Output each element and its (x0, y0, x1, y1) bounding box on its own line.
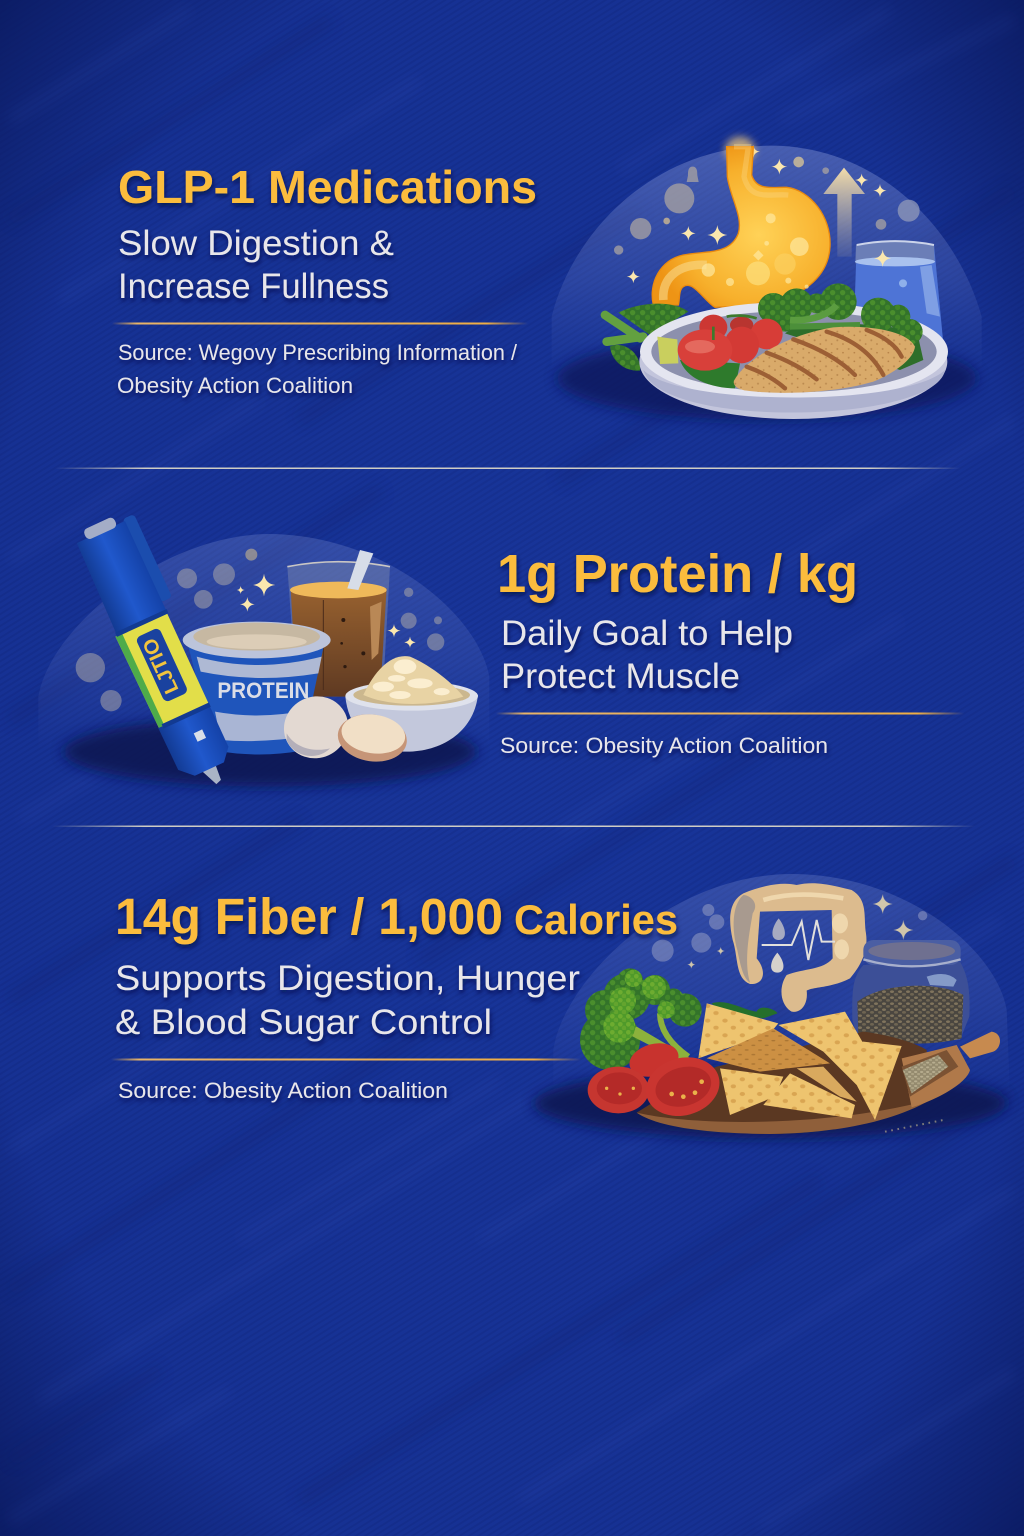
broccoli (758, 283, 923, 370)
broccoli (580, 968, 702, 1070)
chia seed jar (852, 940, 970, 1044)
bubbles (652, 904, 927, 962)
backdrop (553, 874, 1010, 1097)
injector pen: LJTIO (139, 635, 183, 697)
injector pen (69, 508, 251, 797)
icon: stomach (652, 147, 830, 307)
stomach glow (725, 137, 755, 163)
cup label: PROTEIN (217, 678, 309, 703)
tomatoes (678, 315, 783, 371)
pen clip (122, 514, 172, 602)
sparkles (687, 894, 913, 969)
subheading (501, 614, 793, 696)
wooden plate (637, 1032, 930, 1134)
wooden scoop with seeds (902, 1032, 1000, 1107)
source: Source: Obesity Action Coalition (500, 733, 828, 758)
section 1 illustration: stomach and plate (552, 137, 982, 420)
subheading (118, 224, 394, 306)
backdrop (38, 534, 489, 750)
plate (639, 302, 948, 419)
source: Source: Obesity Action Coalition (118, 1078, 448, 1103)
yellow pepper (657, 337, 678, 364)
icon: glass of water (853, 241, 943, 343)
subheading: Protect Muscle (501, 657, 740, 696)
shadow (63, 717, 477, 787)
eggs (274, 686, 410, 769)
whole grain chips (698, 1003, 902, 1120)
backdrop dome (552, 146, 982, 373)
icon: intestine (730, 883, 866, 1012)
subheading (115, 959, 580, 1042)
subheading: Slow Digestion & (118, 224, 394, 263)
heading: Calories (514, 896, 678, 943)
protein shake glass (287, 550, 390, 697)
pen body (75, 521, 167, 635)
section 3 text (115, 888, 678, 945)
source: Obesity Action Coalition (117, 373, 353, 398)
subheading: Supports Digestion, Hunger (115, 959, 580, 998)
spilled seeds (885, 1120, 943, 1132)
needle (202, 765, 223, 787)
section 2 illustration: pen and protein foods (38, 508, 489, 797)
pen yellow band (115, 613, 209, 728)
bowl of oats (345, 656, 478, 752)
section 3 illustration: gut, fiber foods (533, 874, 1010, 1138)
bubbles (76, 549, 444, 711)
lettuce under tomatoes (680, 360, 740, 388)
subheading: & Blood Sugar Control (115, 1003, 492, 1042)
subheading: Daily Goal to Help (501, 614, 793, 653)
subheading: Increase Fullness (118, 267, 389, 306)
heading: 1g Protein / kg (497, 544, 858, 604)
heading: 14g Fiber / 1,000 (115, 888, 503, 945)
floating bubbles (614, 157, 920, 255)
grilled chicken (734, 327, 915, 393)
shadow (533, 1068, 1007, 1138)
protein yogurt cup (183, 622, 331, 754)
greens: left leaf (605, 304, 688, 371)
source: Source: Wegovy Prescribing Information / (118, 340, 518, 365)
tomatoes (588, 1038, 726, 1124)
pen label (135, 627, 189, 703)
icon: up arrow (823, 168, 865, 257)
leaf garnish (712, 1002, 777, 1018)
sparkles (627, 145, 887, 283)
source (117, 340, 518, 398)
sparkles (237, 574, 416, 648)
plate shadow (557, 337, 977, 420)
heading: GLP-1 Medications (118, 161, 537, 213)
